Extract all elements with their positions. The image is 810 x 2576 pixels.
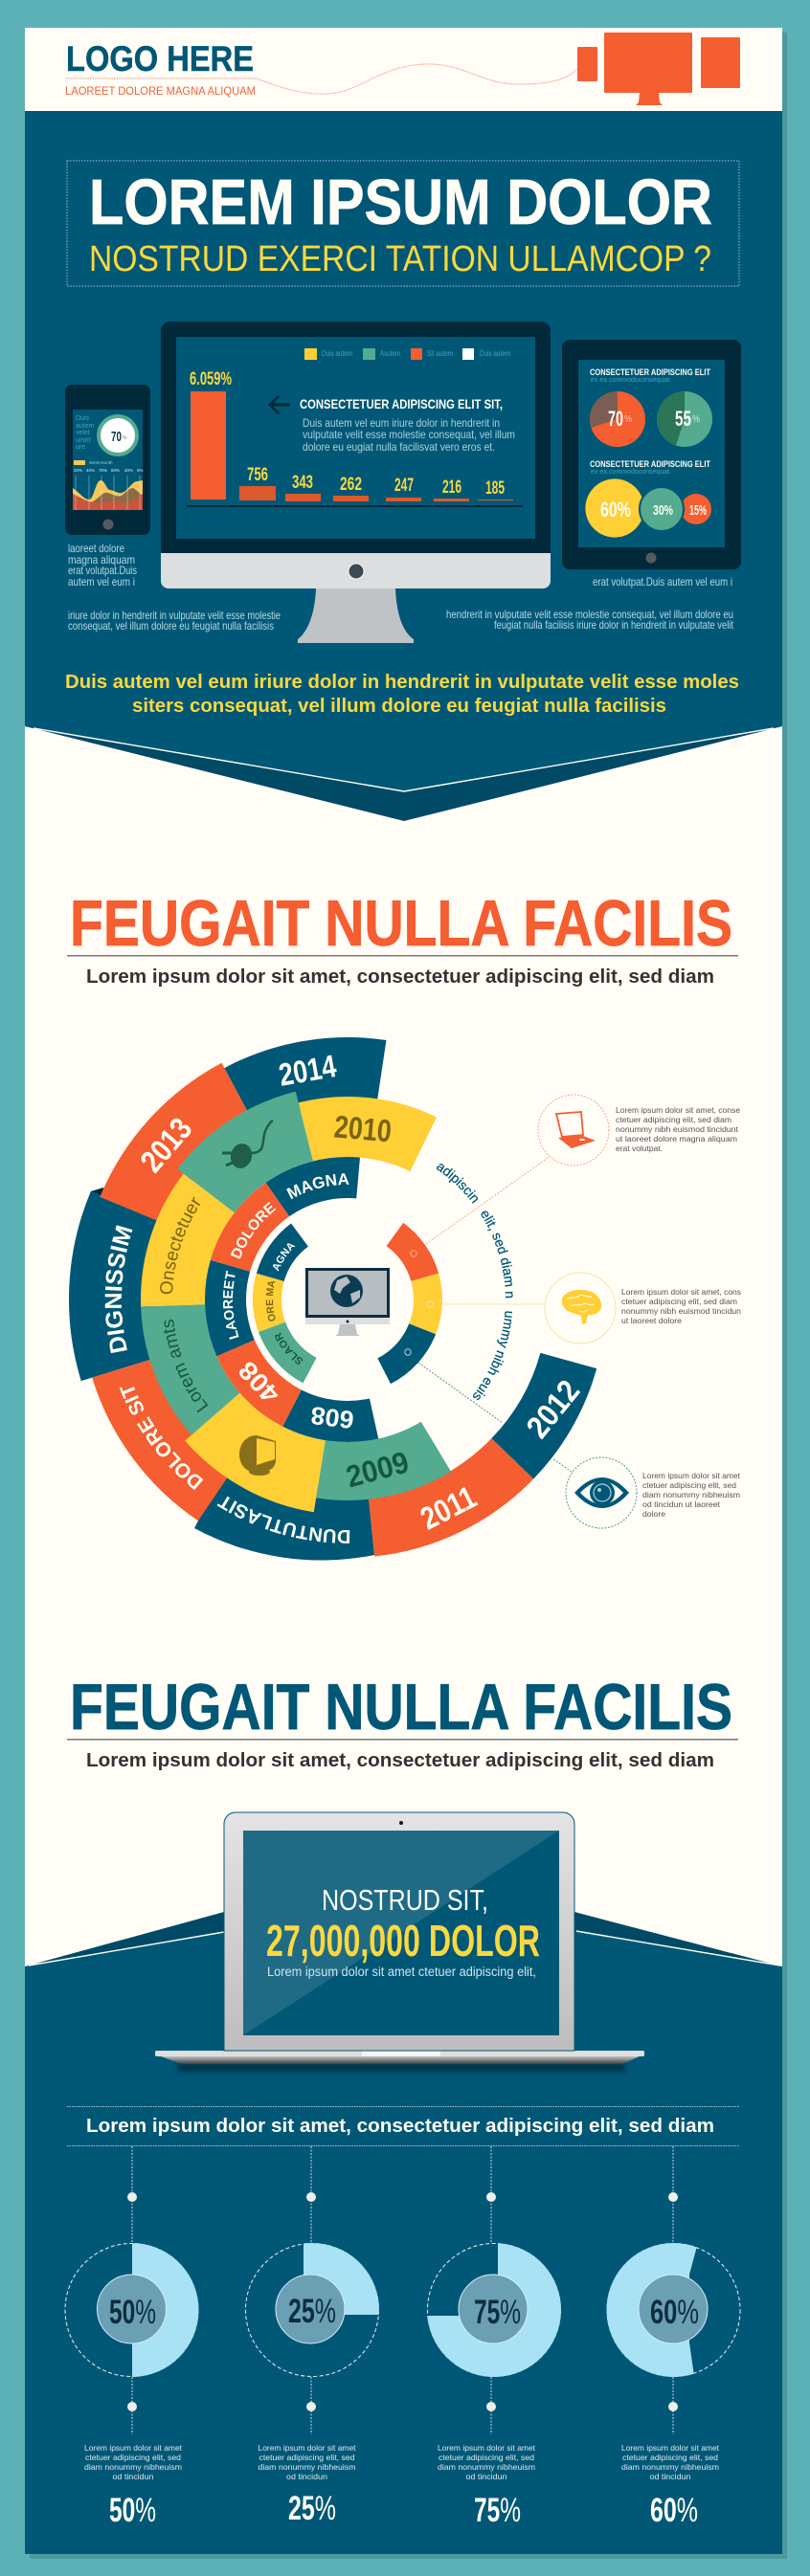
phone side text: autem <box>76 423 95 430</box>
icon: retro monitor <box>239 1435 276 1476</box>
bar chart: 185 <box>485 478 505 499</box>
label MAGNA: MAGNA <box>286 1173 349 1200</box>
phone percent row: 5% <box>137 468 144 473</box>
hero summary text: siters consequat, vel illum dolore eu feugiat nulla facilisis <box>132 696 666 717</box>
column text: 25 percent: diam nonummy nibheuism <box>259 2462 356 2472</box>
donut: 25 percent: 25% <box>288 2293 336 2330</box>
curved ring caption: elit, sed diam n <box>481 1211 513 1298</box>
bar chart <box>187 369 523 507</box>
callout text: ctetuer adipiscing elit, sed diam <box>621 1297 737 1306</box>
icon: left arrow <box>270 396 290 413</box>
callout text: dolore <box>642 1509 665 1519</box>
navy hero panel with chevron <box>25 111 782 821</box>
column text: 60 percent: diam nonummy nibheuism <box>621 2462 719 2472</box>
column text: 75 percent <box>438 2443 536 2481</box>
bar chart: 262 <box>340 475 362 495</box>
bar chart: 343 <box>292 473 313 493</box>
icon: device trio <box>577 33 740 105</box>
tablet heading two: ex ea commodoconsequat. <box>591 469 671 476</box>
bubble chart: 30% <box>653 502 673 519</box>
phone side text: velet <box>76 430 90 436</box>
pie 55 percent <box>657 391 712 447</box>
column text: 60 percent: od tincidun <box>649 2472 691 2481</box>
device captions: erat volutpat.Duis autem vel eum i <box>593 575 732 588</box>
device captions: magna aliquam <box>68 553 135 566</box>
callout: brain <box>545 1273 742 1344</box>
pie 70 percent: 70 <box>608 407 623 431</box>
label Lorem amts: Lorem amts <box>163 1319 209 1412</box>
donut: 75 percent: 75% <box>474 2294 521 2331</box>
hero summary text: Duis autem vel eum iriure dolor in hendrerit in vulputate velit esse moles <box>65 672 739 693</box>
phone percent row <box>74 468 144 473</box>
icon: brain <box>562 1290 601 1324</box>
callout text <box>621 1287 742 1325</box>
callout text: ctetuer adipiscing elit, sed diam <box>616 1115 731 1124</box>
column text: 50 percent <box>84 2443 183 2481</box>
main title: LOREM IPSUM DOLOR <box>89 167 712 238</box>
column text: 50 percent: ctetuer adipiscing elit, sed <box>85 2453 181 2462</box>
phone percent row: 20% <box>124 468 133 473</box>
third ring: icons and labels <box>141 1091 452 1512</box>
device captions: erat volutpat.Duis <box>68 564 137 577</box>
bar chart: 247 <box>394 476 414 496</box>
callout text: nonummy nibh euismod tincidun <box>621 1306 741 1316</box>
chart legend: Duis autem <box>322 348 352 358</box>
chart legend <box>304 348 510 360</box>
column text: 25 percent: od tincidun <box>286 2472 327 2481</box>
label DOLORE SIT: DOLORE SIT <box>119 1387 203 1491</box>
laptop screen caption: Lorem ipsum dolor sit amet ctetuer adipiscing elit, <box>267 1965 536 1979</box>
bubble chart <box>585 478 711 538</box>
device captions: feugiat nulla facilisis iriure dolor in hendrerit in vulputate velit <box>494 618 734 632</box>
phone donut gauge <box>97 414 139 456</box>
laptop screen heading: NOSTRUD SIT, <box>322 1883 488 1917</box>
tablet heading one: CONSECTETUER ADIPISCING ELIT <box>590 367 710 378</box>
callout text: Lorem ipsum dolor sit amet, conse <box>616 1105 740 1115</box>
ring markers <box>405 1251 433 1355</box>
column text: 50 percent: diam nonummy nibheuism <box>84 2462 182 2472</box>
label 2010: 2010 <box>332 1108 393 1148</box>
pie 55 percent: 55 <box>675 407 691 431</box>
logo title: LOGO HERE <box>66 39 254 78</box>
label SLAOR: SLAOR <box>275 1332 303 1365</box>
column text: 25 percent: ctetuer adipiscing elit, sed <box>259 2453 355 2462</box>
lower section subheading <box>67 2107 739 2145</box>
phone percent row: 70% <box>99 468 107 473</box>
callout text: nonummy nibh euismod tincidunt <box>616 1124 739 1134</box>
phone tabs: Week <box>89 460 101 465</box>
column text: 60 percent <box>621 2443 720 2481</box>
column text: 75 percent: diam nonummy nibheuism <box>438 2462 535 2472</box>
callout: laptop <box>538 1095 740 1166</box>
phone tabs <box>74 460 113 465</box>
callout text: ut laoreet dolore magna aliquam <box>616 1134 737 1144</box>
section heading: orange <box>67 887 738 988</box>
screen body text: dolore eu eugiat nulla facilisvat vero eros et. <box>303 440 495 454</box>
laptop screen figure: 27,000,000 DOLOR <box>266 1916 540 1965</box>
column text: 60 percent: Lorem ipsum dolor sit amet <box>621 2443 720 2453</box>
column text: 75 percent: Lorem ipsum dolor sit amet <box>438 2443 536 2453</box>
callout text <box>616 1105 740 1153</box>
phone side text: umrit <box>76 437 91 444</box>
donut: 50 percent <box>65 2146 199 2434</box>
bottom percent figures: 50% <box>109 2492 156 2529</box>
header band <box>65 33 740 105</box>
callout text: ut laoreet dolore <box>621 1316 682 1325</box>
curved ring caption: adipiscin <box>437 1164 479 1204</box>
section heading: navy <box>67 1671 738 1771</box>
callout text: od tincidun ut laoreet <box>642 1499 721 1509</box>
chart legend: Sit autem <box>427 348 453 358</box>
column text: 25 percent <box>259 2443 356 2481</box>
callout text: Lorem ipsum dolor sit amet, cons <box>621 1287 742 1297</box>
subtitle: NOSTRUD EXERCI TATION ULLAMCOP ? <box>89 239 711 279</box>
icon: eye <box>574 1477 629 1508</box>
bottom percent figures: 25% <box>288 2490 336 2527</box>
dotted wave connector <box>66 64 577 94</box>
label AGNA: AGNA <box>272 1243 295 1272</box>
hero title box <box>67 161 739 286</box>
bottom percent figures: 75% <box>474 2492 521 2529</box>
callout text: Lorem ipsum dolor sit amet <box>642 1471 741 1480</box>
device captions: laoreet dolore <box>68 542 124 555</box>
screen body text: Duis autem vel eum iriure dolor in hendrerit in <box>303 416 500 430</box>
section heading: navy: Lorem ipsum dolor sit amet, consectetuer adipiscing elit, sed diam <box>86 1750 714 1771</box>
label 2011: 2011 <box>415 1478 482 1536</box>
screen heading: CONSECTETUER ADIPISCING ELIT SIT, <box>300 396 503 411</box>
outer ring: years and labels <box>69 1037 597 1560</box>
phone tabs: Month <box>101 460 113 465</box>
callout text: diam nonummy nibheuism <box>642 1490 740 1499</box>
tablet heading two: CONSECTETUER ADIPISCING ELIT <box>590 459 710 470</box>
donut: 50 percent: 50% <box>109 2294 156 2331</box>
phone side text: ure <box>76 444 85 451</box>
bubble chart: 15% <box>689 502 707 519</box>
label DOLORE: DOLORE <box>230 1202 276 1259</box>
bottom percent figures: 60% <box>650 2492 698 2529</box>
device captions: hendrerit in vulputate velit esse molestie consequat, vel illum dolore eu <box>446 608 733 621</box>
device captions: consequat, vel illum dolore eu feugiat nulla facilisis <box>68 619 274 633</box>
donut: 75 percent <box>427 2146 561 2434</box>
pie 55 percent: % <box>692 414 700 425</box>
label 608: 608 <box>309 1401 355 1434</box>
phone percent row: 50% <box>111 468 120 473</box>
tablet heading one: ex ea commodoconsequat. <box>591 377 671 384</box>
bubble chart: 60% <box>600 498 631 522</box>
callout text <box>642 1471 741 1519</box>
bar chart: 6.059% <box>190 369 232 389</box>
column text: 75 percent: od tincidun <box>465 2472 507 2481</box>
callout text: ctetuer adipiscing elit, sed <box>642 1480 736 1490</box>
column text: 60 percent: ctetuer adipiscing elit, sed <box>622 2453 718 2462</box>
phone donut gauge: 70 <box>111 429 122 445</box>
curved ring caption <box>437 1164 513 1400</box>
screen body text: vulputate velit esse molestie consequat, vel illum <box>303 428 515 441</box>
donut: 60 percent <box>607 2146 741 2434</box>
tablet <box>562 340 741 569</box>
icon: power plug <box>222 1121 273 1170</box>
bar chart: 216 <box>442 477 461 498</box>
phone area chart <box>73 476 143 510</box>
label 2013: 2013 <box>133 1111 198 1179</box>
laptop <box>155 1812 644 2071</box>
label DIGNISSIM: DIGNISSIM <box>105 1225 132 1353</box>
pie 70 percent <box>590 391 645 447</box>
chart legend: Duis autem <box>480 348 510 358</box>
tablet heading two <box>590 459 710 476</box>
screen body text <box>303 416 515 454</box>
chart legend: Asutem <box>380 348 400 358</box>
lower navy panel <box>25 1912 782 2554</box>
label 2012: 2012 <box>519 1373 586 1445</box>
pie 70 percent: % <box>624 414 632 425</box>
device captions: autem vel eum i <box>68 575 135 588</box>
curved ring caption: ummy nibh euis <box>473 1311 512 1400</box>
phone <box>65 385 150 535</box>
callout text: erat volutpat. <box>616 1144 663 1153</box>
donut: 25 percent <box>245 2146 379 2434</box>
phone percent row: 40% <box>86 468 95 473</box>
tablet heading one <box>590 367 710 384</box>
donut: 60 percent: 60% <box>650 2294 699 2331</box>
column text: 75 percent: ctetuer adipiscing elit, sed <box>439 2453 534 2462</box>
second ring: labels <box>205 1157 379 1442</box>
label 2014: 2014 <box>276 1048 339 1093</box>
bar chart: 756 <box>247 465 268 485</box>
bottom percent figures <box>109 2490 698 2529</box>
icon: laptop <box>556 1112 596 1148</box>
icon: center computer with globe <box>305 1269 390 1336</box>
label LAOREET: LAOREET <box>222 1271 239 1340</box>
label 2009: 2009 <box>343 1445 413 1494</box>
logo tagline: LAOREET DOLORE MAGNA ALIQUAM <box>65 84 256 98</box>
desktop monitor <box>161 322 551 643</box>
phone side text <box>76 415 95 451</box>
label 408: 408 <box>233 1356 285 1409</box>
phone side text: Duis <box>76 415 90 422</box>
label ORE MA: ORE MA <box>266 1281 276 1321</box>
phone percent row: 20% <box>74 468 82 473</box>
lower section subheading: Lorem ipsum dolor sit amet, consectetuer adipiscing elit, sed diam <box>86 2116 714 2137</box>
column text: 25 percent: Lorem ipsum dolor sit amet <box>259 2443 356 2453</box>
section heading: orange: Lorem ipsum dolor sit amet, consectetuer adipiscing elit, sed diam <box>86 966 714 988</box>
column text: 50 percent: od tincidun <box>113 2472 154 2481</box>
hero summary text <box>65 672 739 717</box>
label DUNTUTLASIT: DUNTUTLASIT <box>216 1497 350 1543</box>
label Onsectetuer: Onsectetuer <box>160 1196 201 1294</box>
callout: eye <box>566 1457 741 1528</box>
phone donut gauge: % <box>123 435 127 441</box>
device captions <box>68 542 734 633</box>
column text: 50 percent: Lorem ipsum dolor sit amet <box>84 2443 183 2453</box>
connector lines <box>418 1156 572 1472</box>
inner ring: labels and markers <box>253 1223 442 1384</box>
device captions: iriure dolor in hendrerit in vulputate velit esse molestie <box>68 609 281 622</box>
